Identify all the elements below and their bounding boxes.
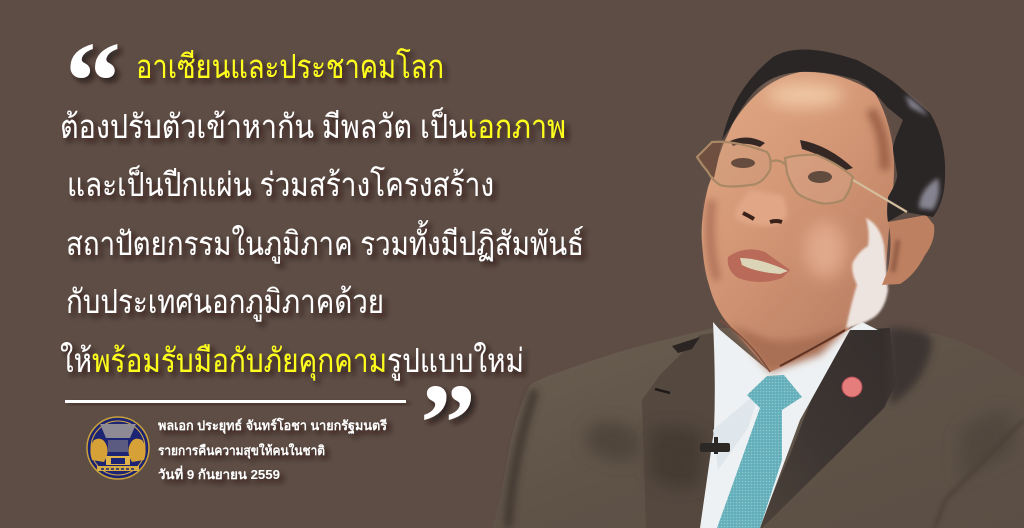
glasses	[697, 142, 907, 212]
suit jacket	[493, 328, 1024, 528]
divider rule	[65, 400, 406, 403]
line 2: ต้องปรับตัวเข้าหากัน มีพลวัต เป็นเอกภาพ	[60, 107, 566, 145]
line 5: กับประเทศนอกภูมิภาคด้วย	[66, 283, 384, 322]
line 4: สถาปัตยกรรมในภูมิภาค รวมทั้งมีปฏิสัมพันธ์	[66, 220, 584, 264]
icon: government seal	[87, 417, 149, 479]
mouth	[728, 249, 790, 282]
caption	[158, 417, 387, 482]
opening quotation mark: “	[65, 20, 121, 144]
white cheek patch	[846, 218, 888, 328]
tie	[717, 375, 802, 528]
quote text block	[60, 20, 584, 486]
eyebrows	[730, 137, 853, 170]
line 1 highlighted: อาเซียนและประชาคมโลก	[136, 48, 444, 85]
left lapel	[642, 333, 716, 528]
ear	[882, 215, 934, 285]
lapel pin	[842, 377, 862, 397]
lapel microphone	[700, 437, 730, 454]
shirt	[700, 322, 878, 528]
right lapel	[758, 328, 895, 528]
nose	[735, 190, 787, 226]
caption: programme: รายการคืนความสุขให้คนในชาติ	[158, 442, 325, 459]
eyes	[731, 158, 755, 168]
line 3: และเป็นปีกแผ่น ร่วมสร้างโครงสร้าง	[67, 165, 494, 203]
caption: date: วันที่ 9 กันยายน 2559	[158, 465, 280, 482]
photo: man in suit	[493, 49, 1024, 528]
closing quotation mark: ”	[420, 362, 476, 486]
neck and face	[702, 72, 894, 372]
caption: speaker: พลเอก ประยุทธ์ จันทร์โอชา นายกรัฐมนตรี	[158, 417, 387, 435]
line 6 with highlight: ให้พร้อมรับมือกับภัยคุกคามรูปแบบใหม่	[60, 342, 524, 381]
forehead highlight	[767, 83, 843, 107]
hair	[722, 49, 945, 222]
